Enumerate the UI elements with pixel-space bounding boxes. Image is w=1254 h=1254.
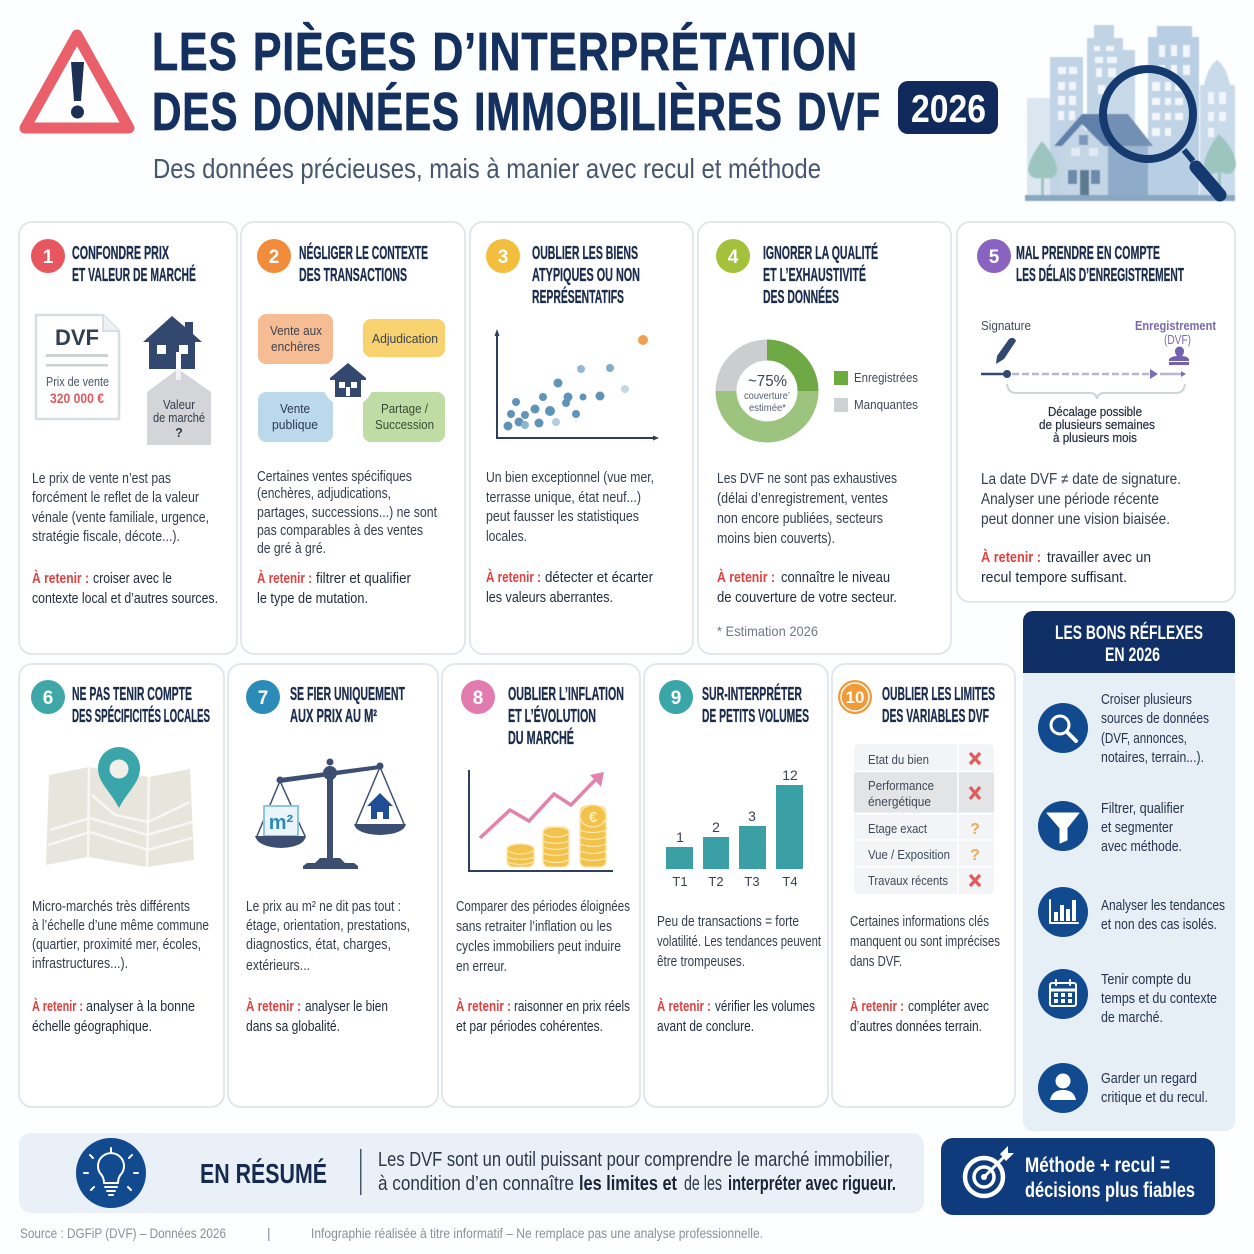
callout text [1025, 1154, 1195, 1202]
takeaway 8: À retenir : [456, 998, 511, 1015]
number badge 3 [486, 239, 520, 273]
reflex 4: de marché. [1101, 1010, 1163, 1026]
heading 6 [72, 684, 210, 726]
number badge 6: 6 [43, 688, 53, 709]
panel: 2 contexte des transactions [241, 222, 465, 654]
body text 10: manquent ou sont imprécises [850, 934, 1000, 950]
heading 1 [72, 243, 196, 285]
takeaway 8: raisonner en prix réels [514, 999, 630, 1015]
icon: magnifier [1038, 703, 1088, 753]
heading 7: SE FIER UNIQUEMENT [290, 684, 405, 704]
scatter plot with outlier [494, 329, 659, 440]
heading 8: DU MARCHÉ [508, 727, 574, 748]
heading 2 [299, 242, 428, 285]
illustration: transaction types: publique [272, 418, 318, 432]
illustration: transaction types: Succession [375, 418, 434, 432]
heading 8: ET L’ÉVOLUTION [508, 705, 596, 726]
takeaway 5: À retenir : [981, 549, 1041, 566]
heading 3: OUBLIER LES BIENS [532, 243, 638, 263]
takeaway 10: compléter avec [908, 999, 989, 1015]
number badge 1: 1 [43, 247, 54, 268]
heading 4 [763, 242, 878, 307]
callout text: Méthode + recul = [1025, 1154, 1170, 1177]
reflex 4: Tenir compte du [1101, 972, 1191, 988]
takeaway 10 [850, 998, 989, 1035]
number badge 7 [246, 680, 280, 714]
reflex 5: critique et du recul. [1101, 1090, 1208, 1106]
takeaway 7 [246, 998, 388, 1035]
body text 9: Peu de transactions = forte [657, 914, 799, 930]
reflex 3: et non des cas isolés. [1101, 917, 1217, 933]
footnote: * Estimation 2026 [717, 623, 818, 639]
body text 1: Le prix de vente n’est pas [32, 471, 171, 487]
footer: source and disclaimer: Infographie réalisée à titre informatif – Ne remplace pas une analyse professionnelle. [311, 1225, 763, 1241]
takeaway 6 [32, 998, 195, 1035]
table: DVF variables: énergétique [868, 795, 931, 809]
body text 4 [717, 471, 897, 547]
heading 10 [882, 684, 995, 726]
reflex 2 [1101, 801, 1184, 855]
illustration: transaction types: Partage / [381, 402, 428, 416]
takeaway 5: travailler avec un [1047, 550, 1151, 566]
side panel header: LES BONS RÉFLEXES [1055, 622, 1203, 644]
body text 8: sans retraiter l’inflation ou les [456, 919, 612, 935]
reflex 2: et segmenter [1101, 820, 1173, 836]
takeaway 1: À retenir : [32, 570, 89, 587]
takeaway 7: dans sa globalité. [246, 1019, 340, 1035]
takeaway 3 [486, 569, 653, 606]
reflex 1: Croiser plusieurs [1101, 692, 1192, 708]
heading 6: DES SPÉCIFICITÉS LOCALES [72, 705, 210, 726]
heading 9: DE PETITS VOLUMES [702, 706, 809, 726]
body text 4: moins bien couverts). [717, 531, 835, 547]
table: DVF variables: Etage exact [868, 822, 927, 836]
heading 8 [508, 684, 624, 748]
body text 9 [657, 914, 821, 970]
takeaway 3: À retenir : [486, 569, 541, 586]
body text 8 [456, 899, 630, 975]
takeaway 4: de couverture de votre secteur. [717, 590, 897, 606]
panel: les bons réflexes [1023, 611, 1235, 1131]
body text 2 [257, 469, 437, 557]
heading 1: CONFONDRE PRIX [72, 243, 169, 263]
body text 6 [32, 899, 209, 972]
takeaway 1: contexte local et d’autres sources. [32, 591, 218, 607]
takeaway 8: et par périodes cohérentes. [456, 1019, 603, 1035]
reflex 4 [1101, 972, 1217, 1026]
takeaway 1: croiser avec le [93, 571, 172, 587]
donut legend [834, 371, 918, 412]
summary text: interpréter avec rigueur. [728, 1173, 896, 1195]
takeaway 10: d’autres données terrain. [850, 1019, 982, 1035]
table: DVF variables: ? [970, 847, 980, 864]
illustration: DVF document and house: Prix de vente [46, 374, 109, 389]
takeaway 6: analyser à la bonne [86, 999, 195, 1015]
takeaway 2 [257, 570, 411, 607]
heading 2: DES TRANSACTIONS [299, 265, 407, 285]
summary text [378, 1149, 896, 1195]
takeaway 2: le type de mutation. [257, 591, 368, 607]
takeaway 9: À retenir : [657, 998, 711, 1015]
body text 10 [850, 914, 1000, 970]
illustration: DVF document and house [36, 315, 211, 445]
reflex 3: Analyser les tendances [1101, 898, 1225, 914]
body text 7 [246, 899, 410, 974]
takeaway 9: vérifier les volumes [715, 999, 815, 1015]
number badge 9: 9 [671, 688, 681, 709]
body text 5: peut donner une vision biaisée. [981, 511, 1170, 528]
icon: target [965, 1146, 1014, 1196]
takeaway 5 [981, 549, 1151, 586]
icon: person [1038, 1063, 1088, 1113]
takeaway 6: échelle géographique. [32, 1019, 152, 1035]
side panel header: EN 2026 [1105, 645, 1160, 666]
heading 7: AUX PRIX AU M² [290, 706, 377, 726]
takeaway 4: À retenir : [717, 569, 775, 586]
body text 7: diagnostics, état, charges, [246, 937, 391, 953]
number badge 10 [838, 680, 872, 714]
donut legend: Manquantes [854, 398, 918, 412]
heading 8: OUBLIER L’INFLATION [508, 684, 624, 704]
body text 10: Certaines informations clés [850, 914, 989, 930]
illustration: transaction types [258, 314, 445, 442]
chart: rising line and coin stacks: € [589, 809, 598, 826]
reflex 3 [1101, 898, 1225, 933]
body text 2: pas comparables à des ventes [257, 523, 423, 539]
takeaway 2: À retenir : [257, 570, 312, 587]
body text 8: en erreur. [456, 959, 507, 975]
body text 6: Micro-marchés très différents [32, 899, 190, 915]
heading 3: ATYPIQUES OU NON [532, 265, 640, 285]
reflex 1: sources de données [1101, 711, 1209, 727]
callout: méthode + recul [941, 1138, 1215, 1215]
body text 6: à l’échelle d’une même commune [32, 918, 209, 934]
panel: 7 prix au m² [228, 664, 438, 1107]
title [152, 22, 881, 142]
table: DVF variables: ? [970, 821, 980, 838]
subtitle: Des données précieuses, mais à manier avec recul et méthode [153, 153, 821, 184]
panel: 10 limites des variables [832, 664, 1015, 1107]
number badge 4: 4 [728, 247, 739, 268]
illustration: transaction types: enchères [271, 340, 320, 354]
summary label: EN RÉSUMÉ [200, 1158, 327, 1189]
footer: source and disclaimer [20, 1225, 763, 1241]
body text 5: La date DVF ≠ date de signature. [981, 471, 1181, 488]
reflex 2: Filtrer, qualifier [1101, 801, 1184, 817]
timeline: signature to registration: Signature [981, 319, 1031, 333]
body text 7: extérieurs... [246, 958, 310, 974]
takeaway 9: avant de conclure. [657, 1019, 754, 1035]
takeaway 3: détecter et écarter [545, 570, 653, 586]
chart: rising line and coin stacks [469, 770, 613, 871]
bar chart: 2 [712, 819, 720, 835]
title: DES DONNÉES IMMOBILIÈRES DVF [152, 82, 881, 142]
body text 1 [32, 471, 209, 545]
takeaway 7: À retenir : [246, 998, 301, 1015]
bar chart [666, 767, 803, 889]
reflex 5: Garder un regard [1101, 1071, 1197, 1087]
reflex 2: avec méthode. [1101, 839, 1182, 855]
number badge 7: 7 [258, 688, 268, 709]
year badge: 2026 [911, 88, 986, 131]
table: DVF variables: Travaux récents [868, 874, 948, 888]
table: DVF variables: Vue / Exposition [868, 848, 950, 862]
summary text: Les DVF sont un outil puissant pour comprendre le marché immobilier, [378, 1149, 893, 1171]
body text 4: non encore publiées, secteurs [717, 511, 883, 527]
body text 7: étage, orientation, prestations, [246, 918, 410, 934]
footer: source and disclaimer: Source : DGFiP (DVF) – Données 2026 [20, 1225, 226, 1241]
number badge 10: 10 [846, 688, 864, 707]
number badge 1 [31, 239, 65, 273]
body text 2: partages, successions...) ne sont [257, 505, 437, 521]
icon: bar chart [1038, 887, 1088, 937]
body text 3: peut fausser les statistiques [486, 509, 639, 525]
takeaway 4 [717, 569, 897, 606]
heading 1: ET VALEUR DE MARCHÉ [72, 264, 196, 285]
donut chart [726, 350, 808, 432]
panel: 1 confondre prix [19, 222, 237, 654]
number badge 2 [257, 239, 291, 273]
takeaway 2: filtrer et qualifier [316, 571, 411, 587]
timeline: signature to registration: Décalage possible [1048, 405, 1142, 419]
reflex 4: temps et du contexte [1101, 991, 1217, 1007]
timeline: signature to registration: (DVF) [1164, 333, 1191, 347]
number badge 6 [31, 680, 65, 714]
panel: 9 petits volumes [644, 664, 828, 1107]
heading 9: SUR-INTERPRÉTER [702, 683, 802, 704]
table: DVF variables [854, 744, 994, 894]
body text 6: (quartier, proximité mer, écoles, [32, 937, 201, 953]
body text 3 [486, 470, 654, 545]
number badge 4 [716, 239, 750, 273]
takeaway 10: À retenir : [850, 998, 904, 1015]
body text 1: forcément le reflet de la valeur [32, 490, 199, 506]
number badge 8: 8 [473, 688, 483, 709]
body text 8: cycles immobiliers peut induire [456, 939, 621, 955]
body text 1: vénale (vente familiale, urgence, [32, 510, 209, 526]
illustration: city and magnifying glass [1025, 25, 1236, 201]
bar chart: T4 [782, 874, 798, 889]
heading 5: MAL PRENDRE EN COMPTE [1016, 243, 1160, 263]
donut legend: Enregistrées [854, 371, 918, 385]
body text 3: locales. [486, 529, 527, 545]
bar chart: 1 [676, 829, 684, 845]
body text 3: terrasse unique, état neuf...) [486, 490, 641, 506]
number badge 5: 5 [989, 247, 1000, 268]
body text 5: Analyser une période récente [981, 491, 1159, 508]
panel: 4 qualité et exhaustivité [698, 222, 951, 654]
illustration: scales [255, 758, 406, 869]
reflex 5 [1101, 1071, 1208, 1106]
body text 10: dans DVF. [850, 954, 902, 970]
body text 9: volatilité. Les tendances peuvent [657, 934, 821, 950]
bar chart: 3 [748, 808, 756, 824]
reflex 1: notaires, terrain...). [1101, 750, 1204, 766]
takeaway 4: connaître le niveau [781, 570, 890, 586]
summary text: les limites et [579, 1173, 677, 1195]
heading 6: NE PAS TENIR COMPTE [72, 684, 192, 704]
body text 2: de gré à gré. [257, 541, 326, 557]
icon: calendar [1038, 969, 1088, 1019]
timeline: signature to registration: à plusieurs mois [1053, 431, 1137, 445]
takeaway 7: analyser le bien [305, 999, 388, 1015]
bar chart: T1 [672, 874, 688, 889]
body text 5 [981, 471, 1181, 528]
side panel header [1023, 611, 1235, 673]
footer: source and disclaimer: | [267, 1225, 271, 1241]
icon: warning triangle [25, 35, 129, 128]
illustration: DVF document and house: de marché [153, 411, 205, 425]
heading 4: DES DONNÉES [763, 286, 839, 307]
panel: 6 spécificités locales [19, 664, 224, 1107]
illustration: DVF document and house: DVF [55, 325, 99, 350]
heading 3: REPRÉSENTATIFS [532, 286, 624, 307]
heading 3 [532, 243, 640, 307]
number badge 5 [977, 239, 1011, 273]
timeline: signature to registration: de plusieurs semaines [1039, 418, 1155, 432]
timeline: signature to registration [981, 319, 1217, 445]
heading 4: IGNORER LA QUALITÉ [763, 242, 878, 263]
title: LES PIÈGES D’INTERPRÉTATION [152, 22, 858, 82]
illustration: DVF document and house: 320 000 € [50, 390, 104, 406]
takeaway 1 [32, 570, 218, 607]
body text 8: Comparer des périodes éloignées [456, 899, 630, 915]
body text 2: (enchères, adjudications, [257, 486, 391, 502]
takeaway 9 [657, 998, 815, 1035]
table: DVF variables: Etat du bien [868, 753, 929, 767]
summary text: de les [684, 1173, 722, 1195]
heading 10: DES VARIABLES DVF [882, 706, 989, 726]
number badge 3: 3 [498, 247, 508, 268]
heading 4: ET L’EXHAUSTIVITÉ [763, 264, 866, 285]
body text 6: infrastructures...). [32, 956, 128, 972]
illustration: DVF document and house: ? [175, 426, 183, 440]
reflex 1: (DVF, annonces, [1101, 731, 1187, 747]
takeaway 5: recul tempore suffisant. [981, 570, 1127, 586]
bar chart: T2 [708, 874, 724, 889]
number badge 9 [659, 680, 693, 714]
body text 4: Les DVF ne sont pas exhaustives [717, 471, 897, 487]
icon: funnel [1038, 801, 1088, 851]
donut chart: couverture’ [744, 390, 790, 402]
bar chart: 12 [782, 767, 798, 783]
donut chart: ~75% [748, 373, 787, 390]
timeline: signature to registration: Enregistrement [1135, 319, 1217, 333]
body text 7: Le prix au m² ne dit pas tout : [246, 899, 401, 915]
number badge 2: 2 [269, 247, 279, 268]
illustration: transaction types: Vente [280, 402, 310, 416]
takeaway 6: À retenir : [32, 998, 83, 1015]
panel: 3 biens atypiques [470, 222, 693, 654]
body text 9: être trompeuses. [657, 954, 745, 970]
illustration: scales: m² [269, 812, 294, 834]
takeaway 8 [456, 998, 630, 1035]
panel: en résumé [19, 1133, 924, 1213]
takeaway 3: les valeurs aberrantes. [486, 590, 613, 606]
body text 2: Certaines ventes spécifiques [257, 469, 412, 485]
heading 2: NÉGLIGER LE CONTEXTE [299, 242, 428, 263]
panel: 8 inflation [442, 664, 640, 1107]
body text 4: (délai d’enregistrement, ventes [717, 491, 888, 507]
heading 7 [290, 684, 405, 726]
donut chart: estimée* [749, 402, 786, 414]
number badge 8 [461, 680, 495, 714]
body text 3: Un bien exceptionnel (vue mer, [486, 470, 654, 486]
bar chart: T3 [744, 874, 760, 889]
heading 9 [702, 683, 809, 726]
illustration: transaction types: Vente aux [270, 324, 323, 338]
summary text: à condition d’en connaître [378, 1173, 574, 1195]
body text 1: stratégie fiscale, décote...). [32, 529, 180, 545]
callout text: décisions plus fiables [1025, 1179, 1195, 1202]
illustration: DVF document and house: Valeur [163, 398, 195, 412]
icon: light bulb [76, 1138, 146, 1208]
heading 5 [1016, 243, 1184, 285]
table: DVF variables: Performance [868, 779, 934, 793]
illustration: map with pin [46, 747, 194, 867]
reflex 1 [1101, 692, 1209, 766]
illustration: transaction types: Adjudication [372, 332, 438, 346]
heading 10: OUBLIER LES LIMITES [882, 684, 995, 704]
panel: 5 délais d'enregistrement [957, 222, 1235, 602]
